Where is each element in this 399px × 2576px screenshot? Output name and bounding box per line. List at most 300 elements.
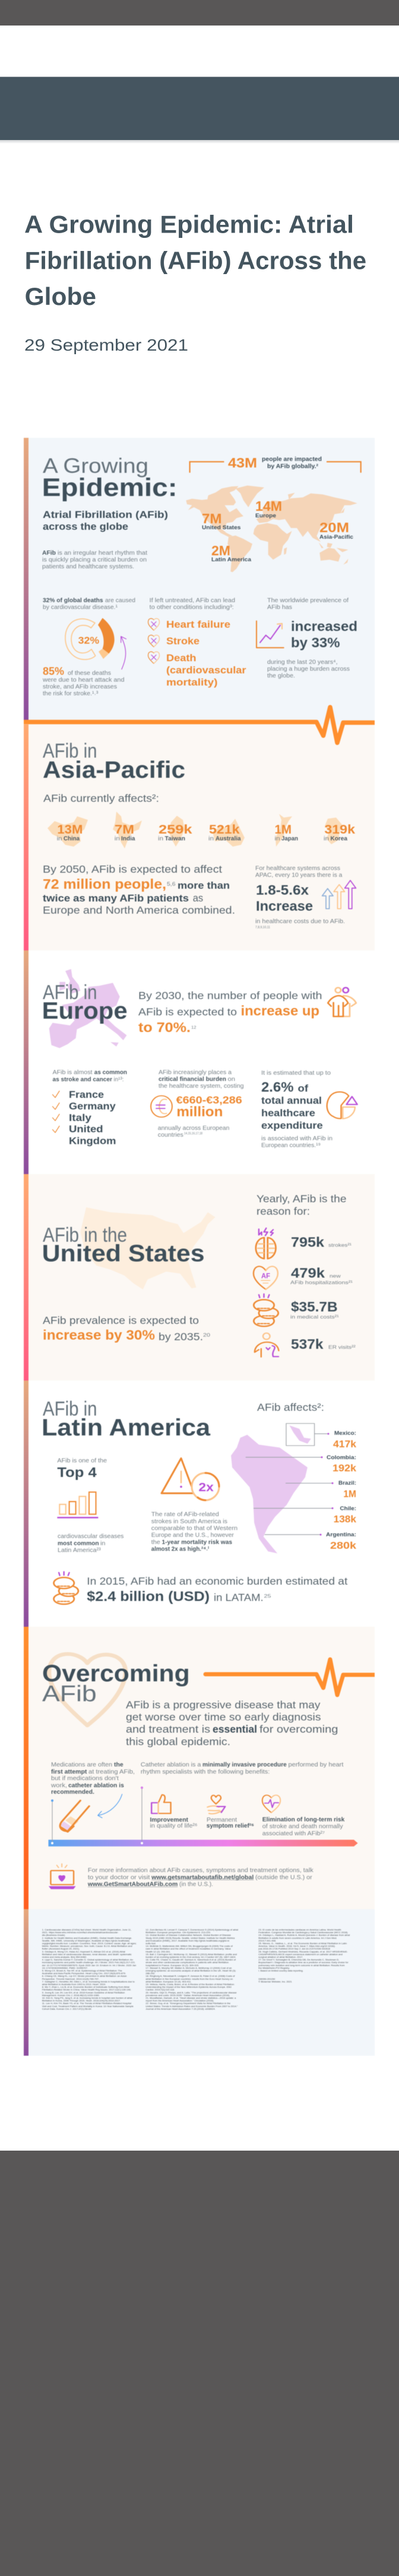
text: yearly reasons: Yearly, AFib is the: [256, 1193, 347, 1205]
references column 1: dis-(Business-Grade): [42, 1934, 65, 1936]
callout: 43M globally: [190, 455, 361, 473]
text: 85% of deaths: stroke, and AFib increases: [43, 684, 117, 691]
references column 1: 5. Wong CX, Brown A, Tse HF, et al. Epidemiology of Atrial Fibrillation: The: [42, 1970, 122, 1972]
text: global deaths: [43, 597, 135, 611]
stat: medical costs: in medical costs²¹: [290, 1314, 339, 1319]
benefit: eliminate risk: Elimination of long-term risk: [262, 1817, 345, 1823]
text: last 20 years: the globe.: [267, 673, 295, 679]
stat: Colombia: Colombia:: [327, 1454, 356, 1461]
text: cardiovascular diseases: [58, 1534, 124, 1554]
references column 3: pulmonary vein isolation and long-term outcome in atrial fibrillation: Results from: [258, 1964, 344, 1967]
references column 3: GBS50-201150: [258, 1978, 275, 1980]
icon: catheter: [60, 1801, 89, 1831]
references column 1: fibrillation in Korea, 2006 Through 2015. Heart. 2018;104(24):2010-2017.: [42, 2000, 121, 2002]
references column 1: 1. Cardiovascular diseases (CVDs) fact sheet. World Health Organization. June 11,: [42, 1929, 131, 1931]
stat: medical costs: [290, 1299, 339, 1319]
icon: heart x: [148, 619, 160, 630]
icon: brain: [256, 1228, 276, 1259]
heading: asia-pacific: Asia-Pacific: [43, 757, 185, 783]
stat: Argentina: [326, 1531, 357, 1551]
stat: Australia: 521k: [209, 822, 240, 837]
text: economic burden: in LATAM.: [214, 1591, 264, 1603]
text: worldwide prevalence: The worldwide prevalence of: [267, 597, 349, 604]
stat: Taiwan: 259k: [159, 822, 192, 837]
callout: 43M globally: people are impacted: [262, 456, 322, 463]
text: progressive disease: and treatment is: [126, 1723, 210, 1735]
stat: 2.6% of expenditure: is associated with AFib in: [261, 1136, 332, 1142]
references column 3: jval.2016.04.1726 PubMed 2014 Sep 2. doi:10.2147/IJGM.S42618: [258, 1948, 330, 1950]
icon: check: [52, 1114, 59, 1121]
stat: medical costs: $35.7B: [291, 1299, 338, 1315]
world map: [186, 485, 357, 572]
text: by 2030: By 2030, the number of people with: [138, 990, 322, 1001]
map: south america: [231, 1435, 308, 1553]
panel: united states: [24, 1174, 375, 1381]
stat: 2.6% of expenditure: [261, 1070, 332, 1149]
text: progressive disease: get worse over time so early diagnosis: [126, 1711, 321, 1723]
text: global deaths: by cardiovascular disease.¹: [43, 605, 118, 611]
text: more information: For more information about AFib causes, symptoms and treatment options, talk: [88, 1868, 314, 1874]
stat: euro cost: €660-€3,286: [176, 1094, 242, 1106]
icon: pie chart: [327, 1092, 357, 1119]
country checklist: Germany: [69, 1101, 116, 1112]
heading: latin america: [42, 1398, 211, 1440]
text: healthcare systems across APAC: For healthcare systems across: [255, 866, 340, 872]
references column 2: 16. Cotte FE, Chaize G, Gaudin AF, Samson A, Vainchtock A et al. (2014) Burden of: [145, 1959, 236, 1961]
stat: India: [113, 812, 142, 848]
references column 2: sults-tool.: [145, 1942, 156, 1945]
references column 3: the Middelheim-PVI Registry.: [258, 1967, 290, 1969]
references column 2: 19. Velleca, Harris, Costa, Bravo, et al. A Review of the Burden of Atrial Fibrillation:: [145, 1983, 235, 1986]
stat: Taiwan: Taiwan: [165, 836, 185, 842]
text: financial burden: AFib increasingly places a: [159, 1070, 232, 1076]
text: medications: first attempt: [51, 1769, 87, 1775]
text: last 20 years: during the last 20 years⁴,: [267, 659, 338, 666]
text: if left untreated: to other conditions including³:: [150, 605, 234, 611]
stat: China: China: [64, 836, 80, 842]
text: progressive disease: this global epidemic.: [126, 1735, 230, 1747]
text: progressive disease: AFib is a progressive disease that may: [126, 1699, 321, 1710]
text: progressive disease: for overcoming: [259, 1723, 338, 1735]
text: more information: to your doctor or visit: [88, 1874, 150, 1881]
donut chart: 32%: 32%: [78, 635, 99, 646]
stat: top 4: Top 4: [57, 1464, 97, 1480]
references column 2: atrial fibrillation. Europace 10 (4): 403-411.: [145, 1981, 191, 1983]
benefit: eliminate risk: associated with AFib²⁷: [262, 1830, 325, 1837]
callout: 43M globally: 43M: [228, 455, 257, 470]
intro text: is an irregular heart rhythm that: [58, 550, 147, 556]
heading: latin america: Latin America: [42, 1414, 211, 1440]
text: 85% of deaths: 85%: [43, 665, 64, 677]
references column 3: America. Value in Health. 2016; Vol 5, Issue 7. https://doi.org/10.1016/j-: [258, 1945, 336, 1948]
text: cardiovascular diseases: in: [100, 1540, 106, 1547]
text: catheter ablation: [141, 1762, 344, 1775]
benefit: improvement: Improvement: [150, 1817, 188, 1824]
stat: 795k strokes: strokes²¹: [328, 1242, 352, 1248]
text: medications: but if medications don't: [51, 1776, 119, 1782]
heading: overcoming afib: Overcoming: [42, 1661, 190, 1687]
icon: check: [52, 1091, 59, 1098]
arrow: blue curved: [98, 1794, 122, 1818]
references column 1: 10. Kim D, Yang PS, Jang E, et al. Increasing trends in hospital care burden of atrial: [42, 1997, 132, 1999]
teal header band: [0, 77, 399, 144]
text: medications: recommended.: [51, 1789, 94, 1796]
intro text: AFib: [42, 550, 56, 556]
text: by 2030: increase up: [241, 1003, 319, 1019]
stat: 2.6% of expenditure: total annual: [261, 1095, 322, 1106]
condition list: mortality): [166, 677, 217, 688]
references column 2: 15. Ball J, Carrington MJ, McMurray JJ, Stewart S (2013) Atrial fibrillation: profile and: [145, 1954, 237, 1955]
text: more information: www.GetSmartAboutAFib.com: [87, 1881, 178, 1888]
stat: China: [48, 816, 88, 847]
text: 85% of deaths: the risk for stroke.¹˒³: [43, 691, 99, 697]
text: by 2050: 72 million people,: [43, 876, 166, 892]
references column 1: 3. Odutayo A, Wong CX, Hsiao AJ, Hopewell S, Altman DG et al. (2016) Atrial: [42, 1951, 125, 1953]
references column 2: atrial fibrillation in five European countries: results from the Euro Heart Survey on: [145, 1978, 233, 1980]
stat: Mexico: Mexico:: [334, 1430, 356, 1436]
references column 1: 6. Chiang CE, Wang KL, Lip GY. Stroke prevention in atrial fibrillation: an Asian: [42, 1975, 126, 1977]
text: currently affects: AFib currently affects²:: [43, 793, 159, 804]
text: as common as stroke: [52, 1070, 127, 1083]
map stat: Latin America: 2M: [211, 543, 230, 558]
references column 1: 19;:1747493020905964. PMID: 31955707.: [42, 1967, 88, 1969]
intro text: is quickly placing a critical burden on: [42, 557, 147, 564]
text: annually across europe: 14,15,16,17,18: [184, 1132, 202, 1136]
text: catheter ablation: performed by heart: [289, 1762, 344, 1769]
stat: top 4: [57, 1458, 107, 1480]
text: medications: Medications are often: [51, 1762, 112, 1769]
text: as common as stroke: as common: [94, 1070, 127, 1076]
condition list: Stroke: [166, 635, 200, 647]
text: stroke rate: the: [151, 1539, 160, 1545]
stat: 2.6% of expenditure: of: [298, 1083, 308, 1094]
icon: large heart outline: [49, 1654, 125, 1725]
references column 1: 11. Lee H, Kim TH, Baek YS, et al. The Trends of Atrial Fibrillation-Related Hospital: [42, 2002, 131, 2005]
country checklist: France: [69, 1090, 104, 1101]
stat: euro cost: [176, 1094, 242, 1120]
text: prevalence by 2035: AFib prevalence is expected to: [43, 1315, 199, 1327]
map: europe: [49, 969, 126, 1048]
top dark bar: [0, 0, 399, 26]
stat: Chile: 138k: [334, 1513, 357, 1525]
text: worldwide prevalence: [267, 597, 349, 611]
text: by 2050: Europe and North America combined.: [43, 904, 235, 916]
map stat: United States: 7M: [202, 511, 222, 526]
icon: rising arrows: [322, 880, 356, 909]
benefit: eliminate risk: of stroke and death normally: [262, 1824, 344, 1830]
references column 3: 24. Odutayo L, Haddad A, Rubink A, Mould-Quevedo J. Burden of disease from atrial: [258, 1934, 350, 1936]
stat: increased by 33%: by 33%: [291, 635, 340, 650]
text: if left untreated: If left untreated, AFib can lead: [150, 597, 235, 604]
references column 3: © Biosense Webster, Inc. 2021: [258, 1981, 292, 1983]
text: by 2030: 12: [191, 1026, 197, 1030]
references column 2: 286-292.: [145, 1973, 155, 1975]
subheading: [43, 509, 168, 532]
text: healthcare costs: 7,8,9,10,11: [255, 926, 270, 929]
condition list: (cardiovascular: [166, 664, 246, 676]
text: healthcare systems across APAC: APAC, every 10 years there is a: [255, 872, 343, 879]
country checklist: Kingdom: [69, 1136, 116, 1146]
references column 3: 2014;7:441-448.: [258, 1940, 276, 1942]
references column 1: 9. Joung B, Lee JH, Lee EH, et al. 2018 Korean Guideline of Atrial Fibrillation: [42, 1992, 125, 1994]
text: stroke rate: The rate of AFib-related: [151, 1512, 219, 1518]
text: cardiovascular diseases: Latin America²³: [58, 1547, 101, 1554]
text: medications: at treating AFib,: [88, 1769, 135, 1775]
references column 2: 22. Sinner, Guy, et al. "Emergency Department Visits for Atrial Fibrillation in the: [145, 2002, 230, 2005]
condition list: Heart failure: [166, 619, 230, 630]
text: healthcare costs: in healthcare costs due to AFib.: [255, 918, 345, 925]
benefit: improvement: in quality of life²⁶: [150, 1823, 197, 1830]
text: medications: catheter ablation is: [68, 1782, 124, 1789]
text: healthcare systems across APAC: [255, 866, 343, 879]
stat: Colombia: 192k: [332, 1462, 357, 1474]
panel: overcoming afib: [24, 1627, 380, 1909]
stat: Australia: in: [208, 836, 214, 842]
stat: Japan: 1M: [274, 822, 292, 837]
text: catheter ablation: Catheter ablation is a: [141, 1762, 201, 1769]
text: financial burden: the healthcare system, costing: [159, 1083, 244, 1089]
stat: Brazil: Brazil:: [338, 1480, 356, 1486]
intro text: [42, 550, 147, 570]
stat: Korea: Korea: [330, 836, 347, 842]
text: more information: www.getsmartaboutafib.net/global: [151, 1874, 254, 1881]
stat: Korea: 319k: [324, 822, 355, 837]
map stat: Latin America: [211, 543, 252, 563]
icon: two people: [328, 988, 356, 1016]
stat: 2.6% of expenditure: European countries.¹⁹: [261, 1143, 321, 1149]
stat: ER visits: 537k: [291, 1336, 324, 1351]
text: by 2030: [138, 990, 322, 1035]
references column 2: Journal of the American Heart Association 7.15 (2018): e008924.: [145, 2008, 216, 2010]
references column 2: Study 2015 (GBD 2015) Results. Seattle, United States: Institute for Health Metrics: [145, 1937, 235, 1939]
heading: europe: [42, 981, 128, 1024]
text: economic burden: 25: [264, 1594, 271, 1599]
references column 1: Australian and Asia-Pacific Perspective. Heart Lung Circ. 2017;26(9):870-879.: [42, 1973, 126, 1975]
text: by 2030: to 70%.: [138, 1019, 191, 1035]
subheading: Atrial Fibrillation (AFib): [43, 509, 168, 520]
heading: overcoming afib: [42, 1661, 190, 1706]
text: prevalence by 2035: [43, 1315, 211, 1343]
text: by 2050: as: [193, 892, 203, 904]
heading: a growing epidemic: A Growing: [43, 454, 148, 478]
references column 1: increasing epidemic and public health challenge. Int J Stroke. 2021 Feb;16(2):217-221.: [42, 1961, 135, 1964]
references column 1: 2021. https://www.who.int/news-room/fact-sheets/detail/cardiovascular-: [42, 1932, 119, 1934]
text: stroke rate: almost 2x as high.²⁴˒ⁱ: [151, 1545, 209, 1553]
text: by 2050: By 2050, AFib is expected to affect: [43, 863, 222, 875]
references column 2: Health 12 (2): 293-301.: [145, 1951, 170, 1953]
icon: bar chart: [57, 1492, 98, 1518]
text: 85% of deaths: were due to heart attack and: [42, 677, 125, 683]
references column 2: 20. Hendrix, Glyn D, Phelps, and A. Lalla. "The projections of cardiovascular disease: [145, 1992, 237, 1994]
references column 3: Buysschaert I. Diagnosis-to-ablation time as a predictor of success: Early choice for: [258, 1961, 349, 1964]
text: stroke rate: Europe and the U.S., however: [151, 1532, 234, 1539]
text: last 20 years: [267, 659, 350, 679]
references column 2: 14. McBride D, Mattenklotz AM, Willich SN, Bruggenjurgen B (2009) The costs of: [145, 1945, 233, 1948]
title: A Growing Epidemic: Atrial: [24, 211, 354, 238]
text: annually across europe: countries: [158, 1132, 183, 1138]
icon: AF heart: [254, 1267, 278, 1289]
references column 1: 2. Institute for Health Metrics and Evaluation (IHME). Global Health Data Exchange.: [42, 1937, 132, 1939]
text: global deaths: are caused: [105, 597, 135, 604]
benefit: symptom relief: [207, 1817, 254, 1830]
references column 3: 23. El costo de las enfermedades cardiacas en América Latina. World Health: [258, 1929, 341, 1931]
references column 2: and Evaluation (IHME), 2017. Available from http://ghdx.healthdata.org/gbd-re: [145, 1940, 229, 1942]
text: if left untreated: [150, 597, 235, 611]
text: medications: [50, 1762, 135, 1796]
map stat: Europe: Europe: [255, 513, 276, 519]
references column 2: Understanding the Impact of the New Millennium Epidemic Across Europe. EMJ: [145, 1986, 232, 1989]
title: Globe: [25, 282, 96, 310]
text: worldwide prevalence: AFib has: [267, 605, 292, 611]
heading: asia-pacific: [43, 740, 185, 783]
text: catheter ablation: minimally invasive procedure: [202, 1762, 287, 1769]
text: economic burden: $2.4 billion (USD): [87, 1588, 210, 1604]
text: global deaths: 32% of global deaths: [43, 597, 103, 604]
stat: Mexico: [333, 1430, 357, 1449]
icon label: AF: AF: [261, 1272, 270, 1280]
icon: check: [52, 1126, 59, 1133]
donut chart: 32%: [65, 618, 115, 660]
heading: united states: [42, 1224, 205, 1267]
benefit: symptom relief: symptom relief²⁶: [207, 1823, 254, 1830]
references column 1: [42, 1929, 137, 2010]
text: prevalence by 2035: increase by 30%: [43, 1327, 155, 1343]
text: by 2050: twice as many AFib patients: [43, 892, 189, 904]
references column 1: 4. Lippi G, Sanchis-Gomar F, Cervellin G. Global epidemiology of atrial fibrillation: An: [42, 1959, 133, 1961]
icon: heart x: [148, 652, 160, 663]
references column 3: 27. De Greef Y, Schwagten B, Chierchia GB, De Asmundis C, Stockman D,: [258, 1959, 339, 1961]
heading: a growing epidemic: Epidemic:: [42, 473, 178, 502]
stat: Chile: Chile:: [340, 1505, 356, 1512]
stat: 795k strokes: 795k: [291, 1235, 324, 1250]
text: healthcare costs: [255, 918, 345, 929]
references column 1: atrial fibrillation in Australia from 1993 to 2013. Heart. 2019.: [42, 1983, 106, 1986]
references column 2: stroke and other cardiovascular complications in patients with atrial fibrillation: [145, 1961, 229, 1964]
stat: Brazil: 1M: [343, 1488, 356, 1499]
text: prevalence by 2035: 20: [203, 1332, 211, 1338]
stat: 479k hospitalizations: new: [330, 1273, 341, 1279]
heading: latin america: AFib in: [43, 1398, 97, 1420]
stat: China: 13M: [57, 822, 83, 837]
stat: 2.6% of expenditure: 2.6%: [261, 1079, 293, 1095]
references column 2: report from the American Heart Association." Circulation (2016).: [145, 2000, 214, 2002]
heading: a growing epidemic: [42, 454, 178, 502]
stat: Australia: [208, 819, 245, 847]
references column 1: Perspective. Thromb Haemost. 2014;111(5):789-797.: [42, 1978, 99, 1980]
icon: heart in hand: [207, 1795, 225, 1814]
stat: Korea: in: [324, 836, 329, 842]
stat: 2.6% of expenditure: healthcare: [261, 1108, 315, 1119]
text: as common as stroke: as stroke and cancer: [52, 1076, 112, 1083]
stat: 1.8-5.6x increase: Increase: [256, 898, 313, 914]
benefit: eliminate risk: [262, 1817, 345, 1837]
country checklist: Italy: [69, 1112, 92, 1123]
connector lines: [246, 1433, 334, 1535]
panel: latin america: [24, 1381, 375, 1627]
references column 1: flutter (Accessed August 24, 2021).: [42, 1948, 80, 1950]
icon: person with stethoscope: [255, 1333, 278, 1357]
stat: Australia: Australia: [216, 836, 241, 842]
heading: overcoming afib: AFib: [42, 1681, 97, 1706]
stat: 795k strokes: [291, 1235, 352, 1250]
text: annually across europe: [158, 1125, 229, 1138]
references column 2: 13. Global Burden of Disease Collaborative Network. Global Burden of Disease: [145, 1934, 231, 1936]
stat: Brazil: [338, 1480, 356, 1499]
references column 3: 26. Hugh Calkins, Gerhard Hindricks, Riccardo Cappato, et al. 2017 HRS/EHRA/E-: [258, 1951, 349, 1953]
icon: heart x: [148, 635, 160, 647]
references column 3: [258, 1929, 350, 1983]
text: 85% of deaths: [42, 665, 125, 697]
references column 3: 25. Nieves, G., Valdiva, L., et al. The Economic Burden of Atrial Fibrillation in Latin: [258, 1942, 347, 1945]
stat: increased by 33%: increased: [291, 618, 357, 634]
references column 2: Cardiol. 2019;7[1]:110-118.: [145, 1989, 175, 1991]
panel: asia-pacific: [24, 724, 375, 950]
arrow: purple curved: [121, 637, 126, 669]
heartbeat line: [205, 1659, 380, 1695]
map stat: Asia-Pacific: 20M: [319, 520, 349, 535]
stat: 2.6% of expenditure: It is estimated that up to: [261, 1070, 331, 1077]
panel: a growing epidemic: [24, 438, 375, 724]
text: as common as stroke: in¹³:: [114, 1076, 124, 1083]
text: more information: (outside the U.S.) or: [255, 1874, 312, 1881]
text: cardiovascular diseases: cardiovascular diseases: [58, 1534, 124, 1540]
text: stroke rate: [151, 1512, 238, 1553]
benefit: improvement: [150, 1817, 197, 1830]
stat: China: in: [57, 836, 62, 842]
text: medications: the: [114, 1762, 124, 1769]
stat: Mexico: 417k: [333, 1438, 357, 1449]
text: as common as stroke: AFib is almost: [52, 1070, 93, 1076]
references column 2: 17. Stewart S, Murphy NF, Walker A, McGuire A, McMurray JJ (2004) Cost of an: [145, 1967, 232, 1969]
references column 1: Cohort Data. Korean Circ J. 2017;47(1):56-64.: [42, 2008, 92, 2010]
references column 2: 12. Zoni-Berisso M, Lercari F, Carazza T, Domenicucci S (2014) Epidemiology of atrial: [145, 1929, 238, 1931]
text: 85% of deaths: of these deaths: [68, 670, 111, 676]
icon: trend chart: [256, 621, 284, 648]
bottom dark footer: [0, 2151, 399, 2576]
stat: increased by 33%: [291, 618, 357, 650]
text: stroke rate: 1-year mortality risk was: [162, 1539, 232, 1545]
text: last 20 years: placing a huge burden across: [267, 666, 350, 673]
icon: thumbs up: [151, 1795, 171, 1814]
references column 3: surgical ablation of atrial fibrillation. 2017.: [258, 1956, 303, 1958]
stat: Taiwan: [158, 816, 192, 847]
condition list: Death: [166, 652, 196, 663]
references column 1: review and meta-analysis. Bmj 354:i4482.: [42, 1956, 87, 1958]
text: by 2050: 5,6: [167, 881, 176, 887]
references column 2: care in atrial fibrillation and the effect of treatment modalities in Germany. Value: [145, 1948, 231, 1950]
references column 1: Management. Korean Circ J. 2018;48(12):1033-1080.: [42, 1995, 100, 1996]
references column 2: 18. Ringborg A, Nieuwlaat R, Lindgren P, Jonsson B, Fidan D et al. (2008) Costs of: [145, 1975, 235, 1977]
references column 1: 8. Wu Y, Zhan L, Liu B, et al. Economic Burden of Individuals Suffering from Atrial: [42, 1986, 129, 1989]
stat: Chile: [334, 1505, 357, 1525]
stat: ER visits: [291, 1336, 356, 1351]
text: progressive disease: [126, 1699, 338, 1747]
title: Fibrillation (AFib) Across the: [25, 247, 366, 275]
heading: europe: Europe: [42, 998, 128, 1024]
stat: euro cost: million: [176, 1104, 223, 1120]
references column 1: Visit and Cost, Treatment Pattern and Mortality in Korea: 10-Year Nationwide Sample: [42, 2005, 134, 2008]
stat: Japan: [274, 814, 298, 847]
text: prevalence by 2035: by 2035.: [159, 1331, 203, 1343]
map stat: United States: [202, 511, 241, 531]
stat: India: in: [115, 836, 120, 842]
text: annually across europe: annually across European: [158, 1125, 229, 1131]
stat: 479k hospitalizations: AFib hospitalizations²¹: [290, 1279, 353, 1285]
references column 2: emerging epidemic: an economic analysis of atrial fibrillation in the UK. Heart 90 (3):: [145, 1970, 236, 1972]
heading: united states: AFib in the: [43, 1224, 127, 1246]
text: by 2030: AFib is expected to: [138, 1006, 237, 1018]
icon: warning 2x: 2x: [198, 1481, 214, 1494]
